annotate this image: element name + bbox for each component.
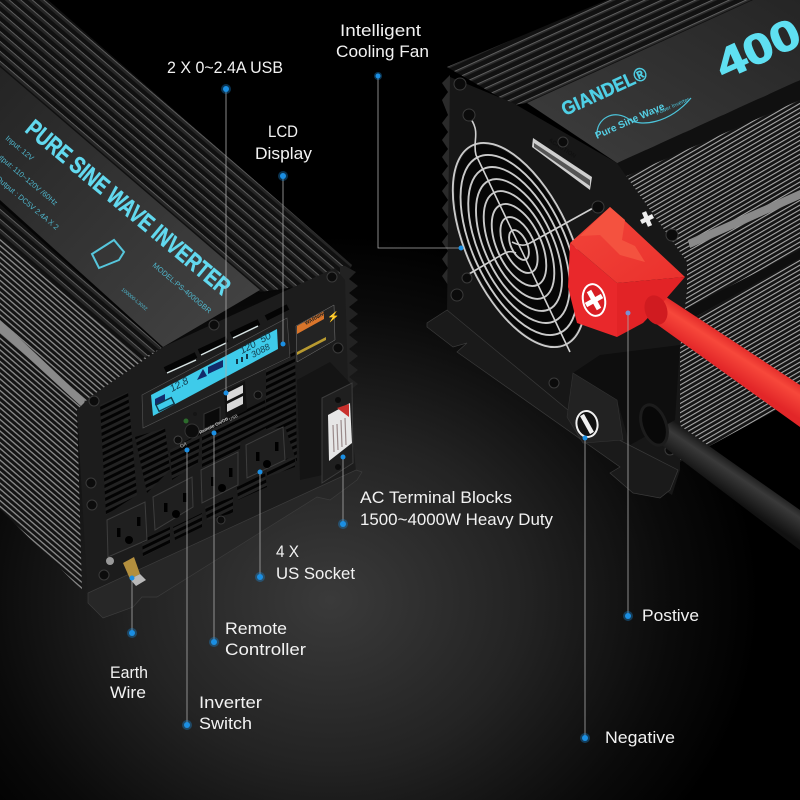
panel shield icon	[92, 240, 124, 268]
top cover panel	[0, 67, 260, 347]
plus sign	[641, 212, 653, 226]
wattage text: 400	[708, 9, 800, 88]
callout: LCD display: LCD	[268, 123, 298, 141]
callout: negative: Negative	[605, 729, 675, 747]
caution label	[532, 138, 592, 190]
panel specifications: Input: 12V	[4, 134, 36, 163]
dark ridges	[617, 80, 800, 320]
power indicators and switch: O/I	[179, 441, 188, 450]
fan guard wires	[468, 115, 595, 352]
power indicators and switch	[174, 412, 199, 450]
fan guard rings	[425, 123, 613, 367]
pure sine wave mark	[594, 97, 691, 142]
fan sawtooth edge	[442, 75, 452, 285]
warning label: WARNING	[304, 310, 328, 327]
callout: AC terminal blocks	[338, 454, 554, 529]
fan recess	[428, 126, 610, 364]
lower heat-sink fins	[0, 200, 163, 590]
pure sine wave mark: Pure Sine Wave	[594, 101, 667, 142]
upper heat-sink fins	[0, 0, 352, 292]
callout: earth wire: Earth	[110, 664, 148, 682]
LCD screen: 12.8	[168, 376, 191, 395]
remote controller jack: Remote On/Off	[198, 416, 229, 435]
callout: remote controller: Remote	[225, 620, 287, 638]
callout: US socket: 4 X	[276, 543, 299, 561]
side sawtooth edge	[340, 266, 358, 391]
callout: US socket: US Socket	[276, 565, 355, 583]
callout: remote controller: Controller	[225, 641, 307, 659]
caution label: ACAUTION	[547, 138, 577, 160]
callout: cooling fan	[336, 22, 464, 250]
negative terminal boot	[567, 345, 680, 449]
callout: AC terminal blocks: AC Terminal Blocks	[360, 489, 512, 507]
LCD surround	[142, 318, 290, 428]
positive terminal boot	[568, 207, 685, 337]
warning label	[296, 305, 339, 362]
model number: MODEL:PS-4000GBR	[151, 261, 214, 316]
LCD screen: 3088	[249, 342, 272, 360]
callout: AC terminal blocks: 1500~4000W Heavy Duty	[360, 511, 554, 529]
callout: US socket	[255, 470, 355, 583]
brand logo: GIANDEL®	[558, 63, 651, 121]
callout: cooling fan: Cooling Fan	[336, 43, 429, 61]
pure sine wave mark: Power Inverter	[655, 97, 691, 117]
face screws	[86, 272, 343, 580]
callout: USB	[167, 59, 283, 396]
certification marks: 100000-L3032	[120, 287, 148, 312]
LCD screen	[151, 329, 278, 416]
callout: LCD display	[255, 123, 313, 346]
top cover panel	[527, 0, 800, 163]
rear face	[447, 77, 687, 495]
top vent slits	[165, 307, 288, 373]
warning label: ⚡	[327, 310, 339, 323]
US socket 2	[153, 477, 193, 530]
mounting bracket	[88, 470, 362, 618]
US socket 1	[107, 502, 147, 557]
US socket 3	[201, 452, 238, 503]
panel title: PURE SINE WAVE INVERTER	[20, 115, 236, 301]
callout: cooling fan: Intelligent	[340, 22, 421, 40]
AC terminal block	[297, 362, 353, 483]
remote controller jack	[198, 407, 229, 435]
earth wire terminal	[106, 557, 146, 586]
callout: earth wire	[110, 576, 148, 702]
front face	[77, 268, 356, 600]
callout: LCD display: Display	[255, 145, 313, 163]
black side strip	[0, 192, 163, 349]
right side fins	[617, 80, 800, 462]
dark groove	[0, 200, 163, 360]
LCD screen: 50	[258, 331, 274, 346]
red cable	[648, 293, 800, 427]
black cable	[655, 415, 800, 550]
callout: inverter switch: Switch	[199, 715, 252, 733]
callout: inverter switch: Inverter	[199, 694, 263, 712]
mounting bracket	[427, 310, 678, 498]
callout: remote controller	[209, 430, 307, 659]
US socket 4	[246, 427, 285, 478]
callout: inverter switch	[182, 448, 263, 733]
callout: positive	[623, 310, 699, 625]
callout: positive: Postive	[642, 607, 699, 625]
USB ports	[224, 381, 247, 422]
LCD screen: 120	[238, 339, 259, 357]
callout: USB: 2 X 0~2.4A USB	[167, 59, 283, 77]
right inverter product view	[425, 0, 800, 550]
rear screws	[451, 78, 678, 455]
left inverter product view	[0, 0, 362, 618]
right upper fins	[447, 0, 753, 105]
callout: earth wire: Wire	[110, 684, 146, 702]
vent slots	[100, 350, 297, 557]
callout: negative	[580, 436, 675, 747]
bright fin ridge	[0, 320, 85, 408]
USB ports: USB	[228, 413, 239, 422]
